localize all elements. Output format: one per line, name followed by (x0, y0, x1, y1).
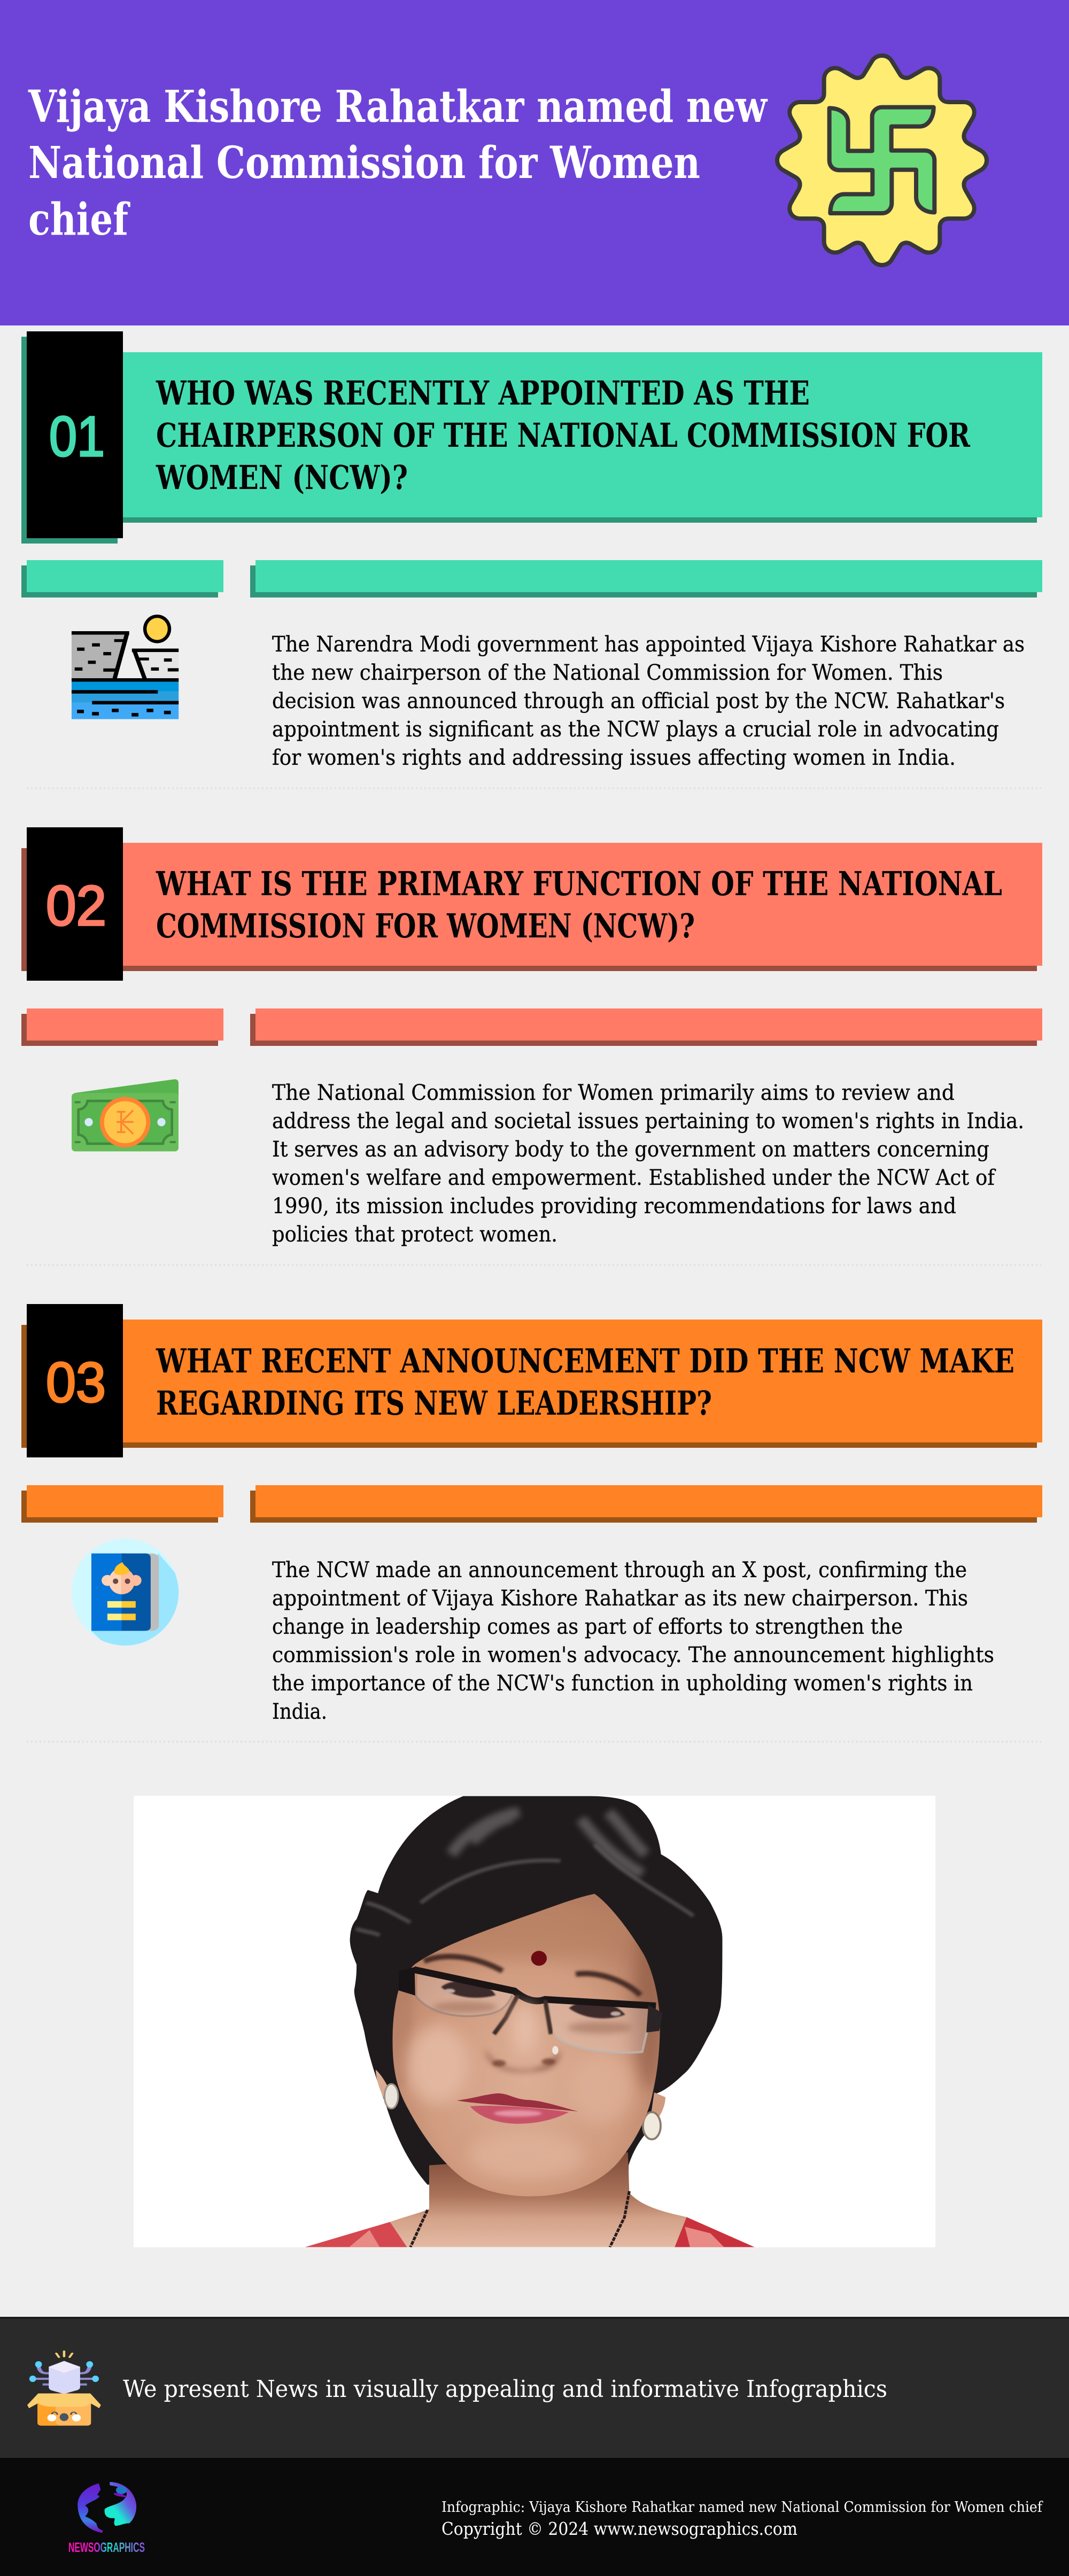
logo wordmark: NEWSOGRAPHICS (68, 2540, 145, 2555)
tagline text: We present News in visually appealing and informative Infographics (123, 2376, 887, 2403)
title: National Commission for Women (28, 137, 700, 189)
body text 02: 1990, its mission includes providing recommendations for laws and (272, 1194, 956, 1219)
icon: swastika badge (777, 56, 987, 265)
heading text 02: COMMISSION FOR WOMEN (NCW)? (156, 906, 695, 945)
body text 01: decision was announced through an official post by the NCW. Rahatkar's (272, 689, 1005, 713)
heading text 02 (156, 864, 1002, 945)
body text 02: The National Commission for Women primarily aims to review and (272, 1081, 955, 1105)
body text 01: for women's rights and addressing issues affecting women in India. (272, 746, 956, 770)
body text 03: The NCW made an announcement through an X post, confirming the (272, 1558, 967, 1582)
icon: passport with face (72, 1539, 179, 1646)
sub bars 02 (21, 1008, 1042, 1046)
body text 03 (272, 1558, 994, 1724)
portrait photo of Vijaya Kishore Rahatkar (134, 1796, 935, 2247)
sub bars 01 (21, 560, 1042, 598)
section 02 (21, 827, 1042, 1265)
heading text 03: REGARDING ITS NEW LEADERSHIP? (156, 1384, 712, 1423)
section 03 (21, 1304, 1042, 1742)
icon: banknote (72, 1079, 179, 1151)
section 01 (21, 331, 1042, 788)
footer band (0, 2458, 1069, 2576)
title: chief (28, 194, 130, 245)
body text 03: the importance of the NCW's function in upholding women's rights in (272, 1671, 973, 1696)
number 01: 01 (49, 405, 105, 468)
icon: robot gem in a box (27, 2351, 101, 2426)
body text 02: policies that protect women. (272, 1222, 557, 1247)
heading text 01: WHO WAS RECENTLY APPOINTED AS THE (156, 374, 810, 413)
credit text (441, 2499, 1043, 2539)
heading bar 02 (21, 827, 1042, 981)
body text 02 (272, 1081, 1024, 1247)
heading bar 01 (21, 331, 1042, 544)
heading text 03 (156, 1341, 1014, 1423)
body text 03: commission's role in women's advocacy. The announcement highlights (272, 1643, 994, 1667)
body text 02: women's welfare and empowerment. Established under the NCW Act of (272, 1166, 996, 1190)
body text 01 (272, 632, 1025, 770)
logo: Newsographics (68, 2482, 145, 2555)
body text 03: appointment of Vijaya Kishore Rahatkar as its new chairperson. This (272, 1586, 968, 1611)
body text 03: change in leadership comes as part of efforts to strengthen the (272, 1615, 903, 1639)
tagline band (0, 2317, 1069, 2458)
body text 02: address the legal and societal issues pertaining to women's rights in India. (272, 1109, 1024, 1134)
header banner (0, 0, 1069, 325)
number 03: 03 (46, 1351, 106, 1414)
heading text 01: WOMEN (NCW)? (156, 458, 408, 497)
body text 01: The Narendra Modi government has appointed Vijaya Kishore Rahatkar as (272, 632, 1025, 657)
body text 02: It serves as an advisory body to the government on matters concerning (272, 1137, 989, 1162)
body text 01: the new chairperson of the National Commission for Women. This (272, 661, 943, 685)
heading bar 03 (21, 1304, 1042, 1457)
number 02: 02 (46, 874, 106, 937)
credit text: Infographic: Vijaya Kishore Rahatkar named new National Commission for Women chief (441, 2499, 1043, 2516)
heading text 01 (156, 374, 970, 497)
credit text: Copyright © 2024 www.newsographics.com (441, 2518, 797, 2539)
body text 01: appointment is significant as the NCW plays a crucial role in advocating (272, 717, 999, 742)
body text 03: India. (272, 1700, 327, 1724)
title (28, 81, 768, 245)
icon: cliffs, sun and water (72, 615, 179, 719)
sub bars 03 (21, 1485, 1042, 1523)
title: Vijaya Kishore Rahatkar named new (28, 81, 768, 133)
